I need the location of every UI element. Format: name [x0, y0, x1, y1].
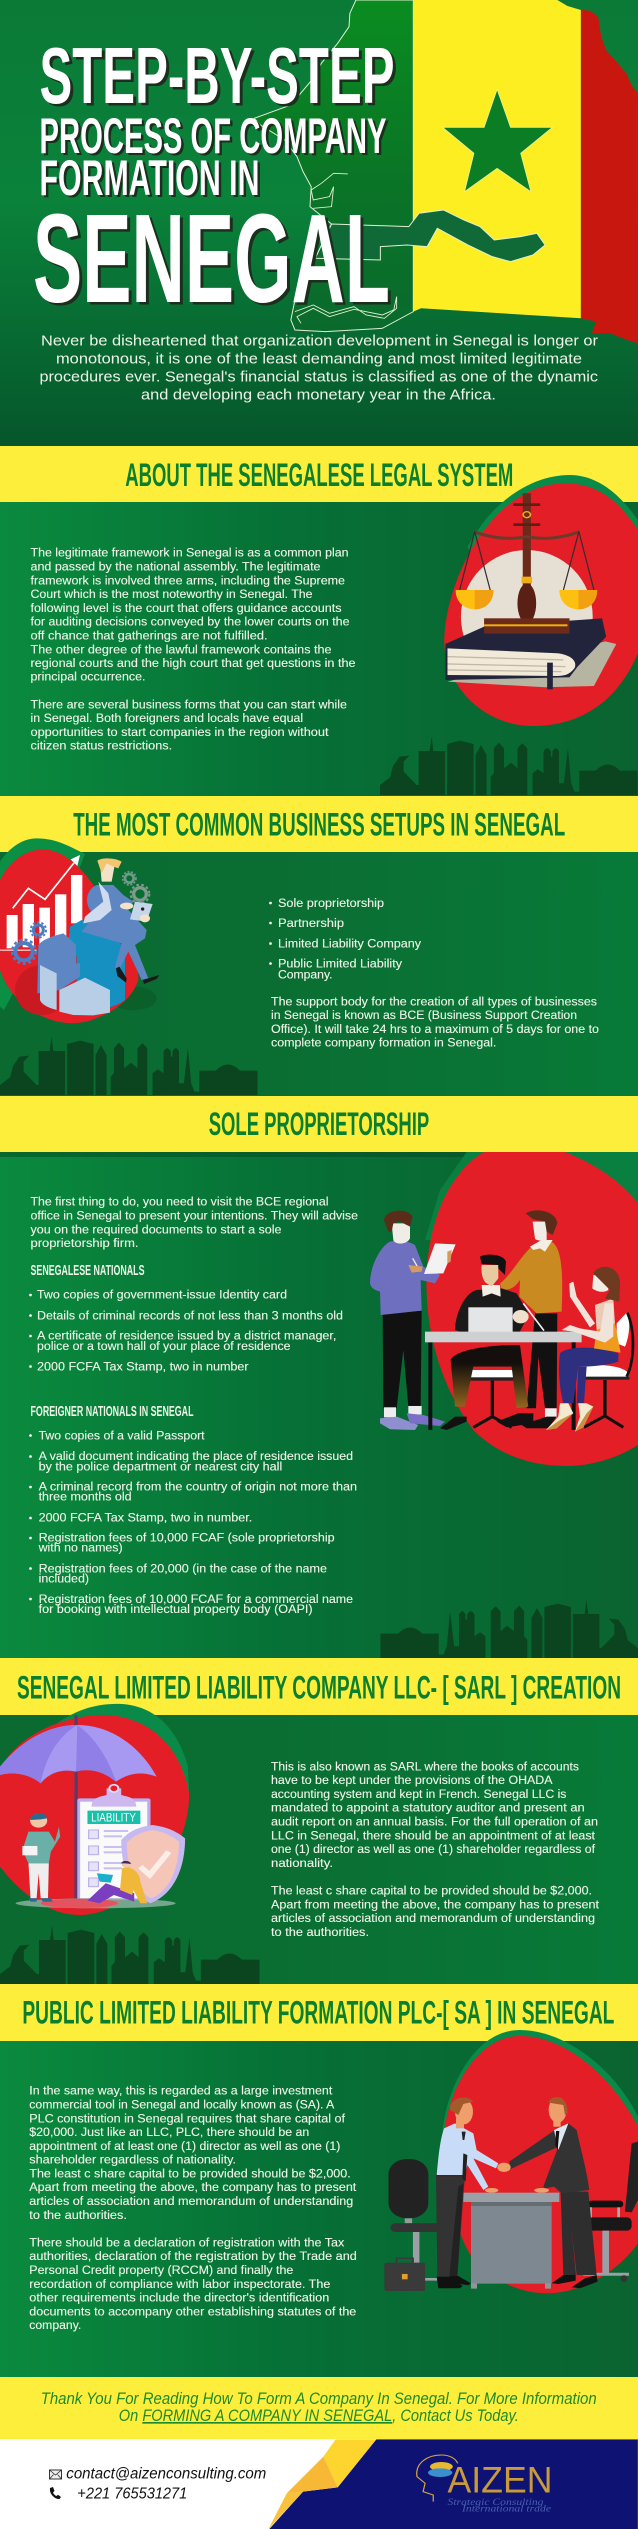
chair: right	[580, 1313, 633, 1427]
body text: shareholder regardless of nationality.	[29, 2153, 236, 2167]
body text: Court which is the most noteworthy in Senegal. The	[30, 587, 313, 601]
body text: citizen status restrictions.	[30, 739, 172, 753]
title: PROCESS OF COMPANY	[40, 108, 386, 164]
illustration: liability umbrella and clipboard: LIABILITY	[91, 1811, 136, 1824]
body text: have to be kept under the provisions of the OHADA	[271, 1773, 553, 1787]
contact: email: contact@aizenconsulting.com	[66, 2466, 266, 2483]
list: foreigner nationals: Registration fees of 10,000 FCAF for a commercial name	[39, 1592, 353, 1606]
title: FORMATION IN	[42, 152, 262, 208]
body text: mandated to appoint a statutory auditor and present an	[271, 1801, 585, 1815]
list: foreigner nationals	[29, 1428, 357, 1616]
handshake scene	[436, 2030, 638, 2293]
body text: There should be a declaration of registration with the Tax	[29, 2235, 344, 2249]
person: seated woman	[546, 1267, 621, 1432]
body text: The support body for the creation of all types of businesses	[271, 994, 597, 1008]
skyline	[0, 1037, 258, 1095]
bullet list: Sole proprietorship	[278, 896, 384, 910]
body text: appointment of at least one (1) director as well as one (1)	[29, 2139, 340, 2153]
body text: $20,000. Just like an LLC, PLC, there should be an	[29, 2125, 309, 2139]
list: Senegalese nationals: 2000 FCFA Tax Stamp, two in number	[37, 1359, 249, 1373]
intro text: and developing each monetary year in the Africa.	[141, 387, 496, 404]
intro text	[30, 1195, 358, 1250]
body text: authorities, declaration of the registration by the Trade and	[29, 2249, 357, 2263]
list: foreigner nationals: Two copies of a valid Passport	[39, 1428, 205, 1442]
body text: principal occurrence.	[30, 670, 146, 684]
chair: left and briefcase	[384, 2159, 447, 2291]
bullet list: Limited Liability Company	[278, 937, 422, 951]
list: foreigner nationals: with no names)	[38, 1541, 123, 1555]
bullet list: Partnership	[278, 916, 344, 930]
body text: In the same way, this is regarded as a large investment	[29, 2084, 333, 2098]
body text: documents to accompany other establishing statutes of the	[29, 2304, 357, 2318]
title: FORMATION IN	[40, 150, 260, 206]
list: foreigner nationals: for booking with intellectual property body (OAPI)	[39, 1602, 313, 1616]
body text: regional courts and the high court that get questions in the	[30, 656, 356, 670]
bullet list: Public Limited Liability	[278, 957, 403, 971]
body text: other requirements include the director's identification	[29, 2291, 329, 2305]
body text	[271, 994, 599, 1050]
person: standing with paper	[370, 1211, 456, 1430]
skyline	[380, 737, 638, 795]
body text: recordation of compliance with labor inspectorate. The	[29, 2277, 331, 2291]
body text: one (1) director as well as one (1) shareholder regardless of	[271, 1842, 596, 1856]
bullet list	[269, 896, 422, 981]
list: Senegalese nationals: police or a town hall of your place of residence	[37, 1339, 291, 1353]
heading band	[0, 1096, 638, 1152]
body text: LLC in Senegal, there should be an appointment of at least	[271, 1828, 596, 1842]
heading band	[0, 1658, 638, 1715]
body text: Office). It will take 24 hrs to a maximum of 5 days for one to	[271, 1022, 599, 1036]
intro text: monotonous, it is one of the least demanding and most limited legitimate	[56, 350, 582, 368]
body text: opportunities to start companies in the region without	[30, 725, 329, 739]
body text: and passed by the national assembly. The legitimate	[30, 560, 321, 574]
chair: centre	[467, 1370, 516, 1427]
intro text: office in Senegal to present your intentions. They will advise	[30, 1208, 358, 1222]
illustration: businessman with growth chart	[0, 838, 159, 1023]
panel: most common business setups	[0, 796, 638, 1096]
body text: to the authorities.	[271, 1925, 369, 1939]
skyline	[0, 1926, 260, 1984]
body text: Apart from meeting the above, the company has to present	[29, 2180, 357, 2194]
logo: Aizen	[417, 2455, 552, 2514]
body text: in Senegal is known as BCE (Business Support Creation	[271, 1008, 577, 1022]
body text: articles of association and memorandum of understanding	[271, 1911, 595, 1925]
panel: sole proprietorship	[0, 1096, 638, 1658]
thank you text	[41, 2390, 597, 2425]
panel: public limited liability	[0, 1984, 638, 2377]
intro text: you on the required documents to start a sole	[30, 1222, 282, 1236]
body text: articles of association and memorandum of understanding	[29, 2194, 353, 2208]
body text: The least c share capital to be provided should be $2,000.	[271, 1884, 592, 1898]
title: STEP-BY-STEP	[42, 34, 398, 122]
body text: for auditing decisions conveyed by the lower courts on the	[30, 615, 350, 629]
illustration: liability umbrella and clipboard	[0, 1704, 189, 1915]
panel: thank you	[0, 2377, 638, 2439]
body text: audit report on an annual basis. For the full operation of an	[271, 1814, 598, 1828]
desk	[425, 1332, 582, 1342]
body text	[271, 1759, 600, 1939]
illustration: handshake over a desk	[384, 2030, 638, 2293]
body text: The least c share capital to be provided should be $2,000.	[29, 2166, 351, 2180]
intro text	[40, 333, 598, 404]
body text: The other degree of the lawful framework contains the	[30, 642, 332, 656]
heading band	[0, 1984, 638, 2041]
man: right	[509, 2097, 598, 2288]
title: PROCESS OF COMPANY	[42, 110, 389, 166]
list: foreigner nationals: included)	[39, 1571, 89, 1585]
list: foreigner nationals: A valid document indicating the place of residence issued	[39, 1449, 353, 1463]
person: standing in orange sweater	[500, 1210, 562, 1428]
thank you text: On FORMING A COMPANY IN SENEGAL, Contact Us Today.	[119, 2407, 519, 2425]
body text: There are several business forms that you can start while	[30, 697, 347, 711]
title: SENEGAL	[33, 188, 390, 329]
skyline	[380, 1600, 638, 1658]
list: foreigner nationals: Registration fees of 20,000 (in the case of the name	[39, 1561, 327, 1575]
body text: This is also known as SARL where the books of accounts	[271, 1759, 579, 1773]
list: Senegalese nationals: A certificate of residence issued by a district manager,	[37, 1329, 336, 1343]
title: SENEGAL	[36, 190, 393, 332]
body text	[30, 546, 356, 753]
body text: complete company formation in Senegal.	[271, 1036, 496, 1050]
body text: commercial tool in Senegal and locally known as (SA). A	[29, 2098, 335, 2112]
illustration: team around a desk	[370, 1152, 638, 1466]
panel: about the legal system	[0, 446, 638, 796]
intro text: procedures ever. Senegal's financial status is classified as one of the dynamic	[40, 368, 598, 386]
heading band	[0, 796, 638, 852]
title	[33, 31, 398, 332]
list: foreigner nationals: A criminal record from the country of origin not more than	[39, 1480, 357, 1494]
navy and gold shapes	[268, 2439, 638, 2529]
body text: to the authorities.	[29, 2208, 127, 2222]
body text: nationality.	[271, 1856, 333, 1870]
intro text: proprietorship firm.	[30, 1236, 138, 1250]
list: foreigner nationals: Registration fees of 10,000 FCAF (sole proprietorship	[39, 1531, 335, 1545]
body text: off chance that gatherings are not fulfilled.	[30, 628, 268, 642]
person: seated with laptop	[440, 1255, 544, 1430]
panel: footer	[0, 2439, 638, 2529]
list: Senegalese nationals: Two copies of government-issue Identity card	[37, 1288, 287, 1302]
map of Senegal in flag colours	[254, 0, 638, 343]
heading band	[0, 446, 638, 502]
heading band: SOLE PROPRIETORSHIP	[209, 1106, 429, 1142]
list: Senegalese nationals: Details of criminal records of not less than 3 months old	[37, 1308, 343, 1322]
subheading: Senegalese nationals: SENEGALESE NATIONALS	[30, 1262, 144, 1279]
body text: Apart from meeting the above, the company has to present	[271, 1897, 600, 1911]
panel: limited liability company	[0, 1658, 638, 1984]
thank you text: Thank You For Reading How To Form A Company In Senegal. For More Information	[41, 2390, 597, 2408]
body text: following level is the court that offers guidance accounts	[30, 601, 342, 615]
body text: accounting system and kept in French. Senegal LLC is	[271, 1787, 566, 1801]
list: foreigner nationals: 2000 FCFA Tax Stamp, two in number.	[39, 1510, 252, 1524]
logo: Aizen: AIZEN	[448, 2460, 552, 2501]
contact: phone: +221 765531271	[77, 2485, 187, 2502]
body text: framework is involved three arms, including the Supreme	[30, 573, 345, 587]
intro text: The first thing to do, you need to visit the BCE regional	[30, 1195, 328, 1209]
desk	[463, 2193, 559, 2289]
list: foreigner nationals: three months old	[39, 1490, 132, 1504]
intro text: Never be disheartened that organization development in Senegal is longer or	[41, 333, 598, 350]
logo: Aizen: International trade	[461, 2504, 551, 2514]
body text: The legitimate framework in Senegal is as a common plan	[30, 546, 348, 560]
body text: PLC constitution in Senegal requires that share capital of	[29, 2111, 346, 2125]
body text: in Senegal. Both foreigners and locals have equal	[30, 711, 303, 725]
subheading: foreigner nationals: FOREIGNER NATIONALS IN SENEGAL	[30, 1403, 194, 1420]
title: STEP-BY-STEP	[40, 31, 394, 120]
body text	[29, 2084, 357, 2332]
bullet list: Company.	[278, 967, 332, 981]
list: Senegalese nationals	[29, 1288, 343, 1373]
panel: hero	[0, 0, 638, 446]
illustration: scales of justice on a book	[444, 475, 638, 726]
man: left	[436, 2098, 498, 2288]
body text: company.	[29, 2318, 81, 2332]
chair: right	[583, 2142, 638, 2282]
body text: Personal Credit property (RCCM) and finally the	[29, 2263, 294, 2277]
list: foreigner nationals: by the police department or nearest city hall	[39, 1459, 282, 1473]
star	[443, 89, 552, 192]
logo: Aizen: Strategic Consulting	[448, 2497, 544, 2507]
